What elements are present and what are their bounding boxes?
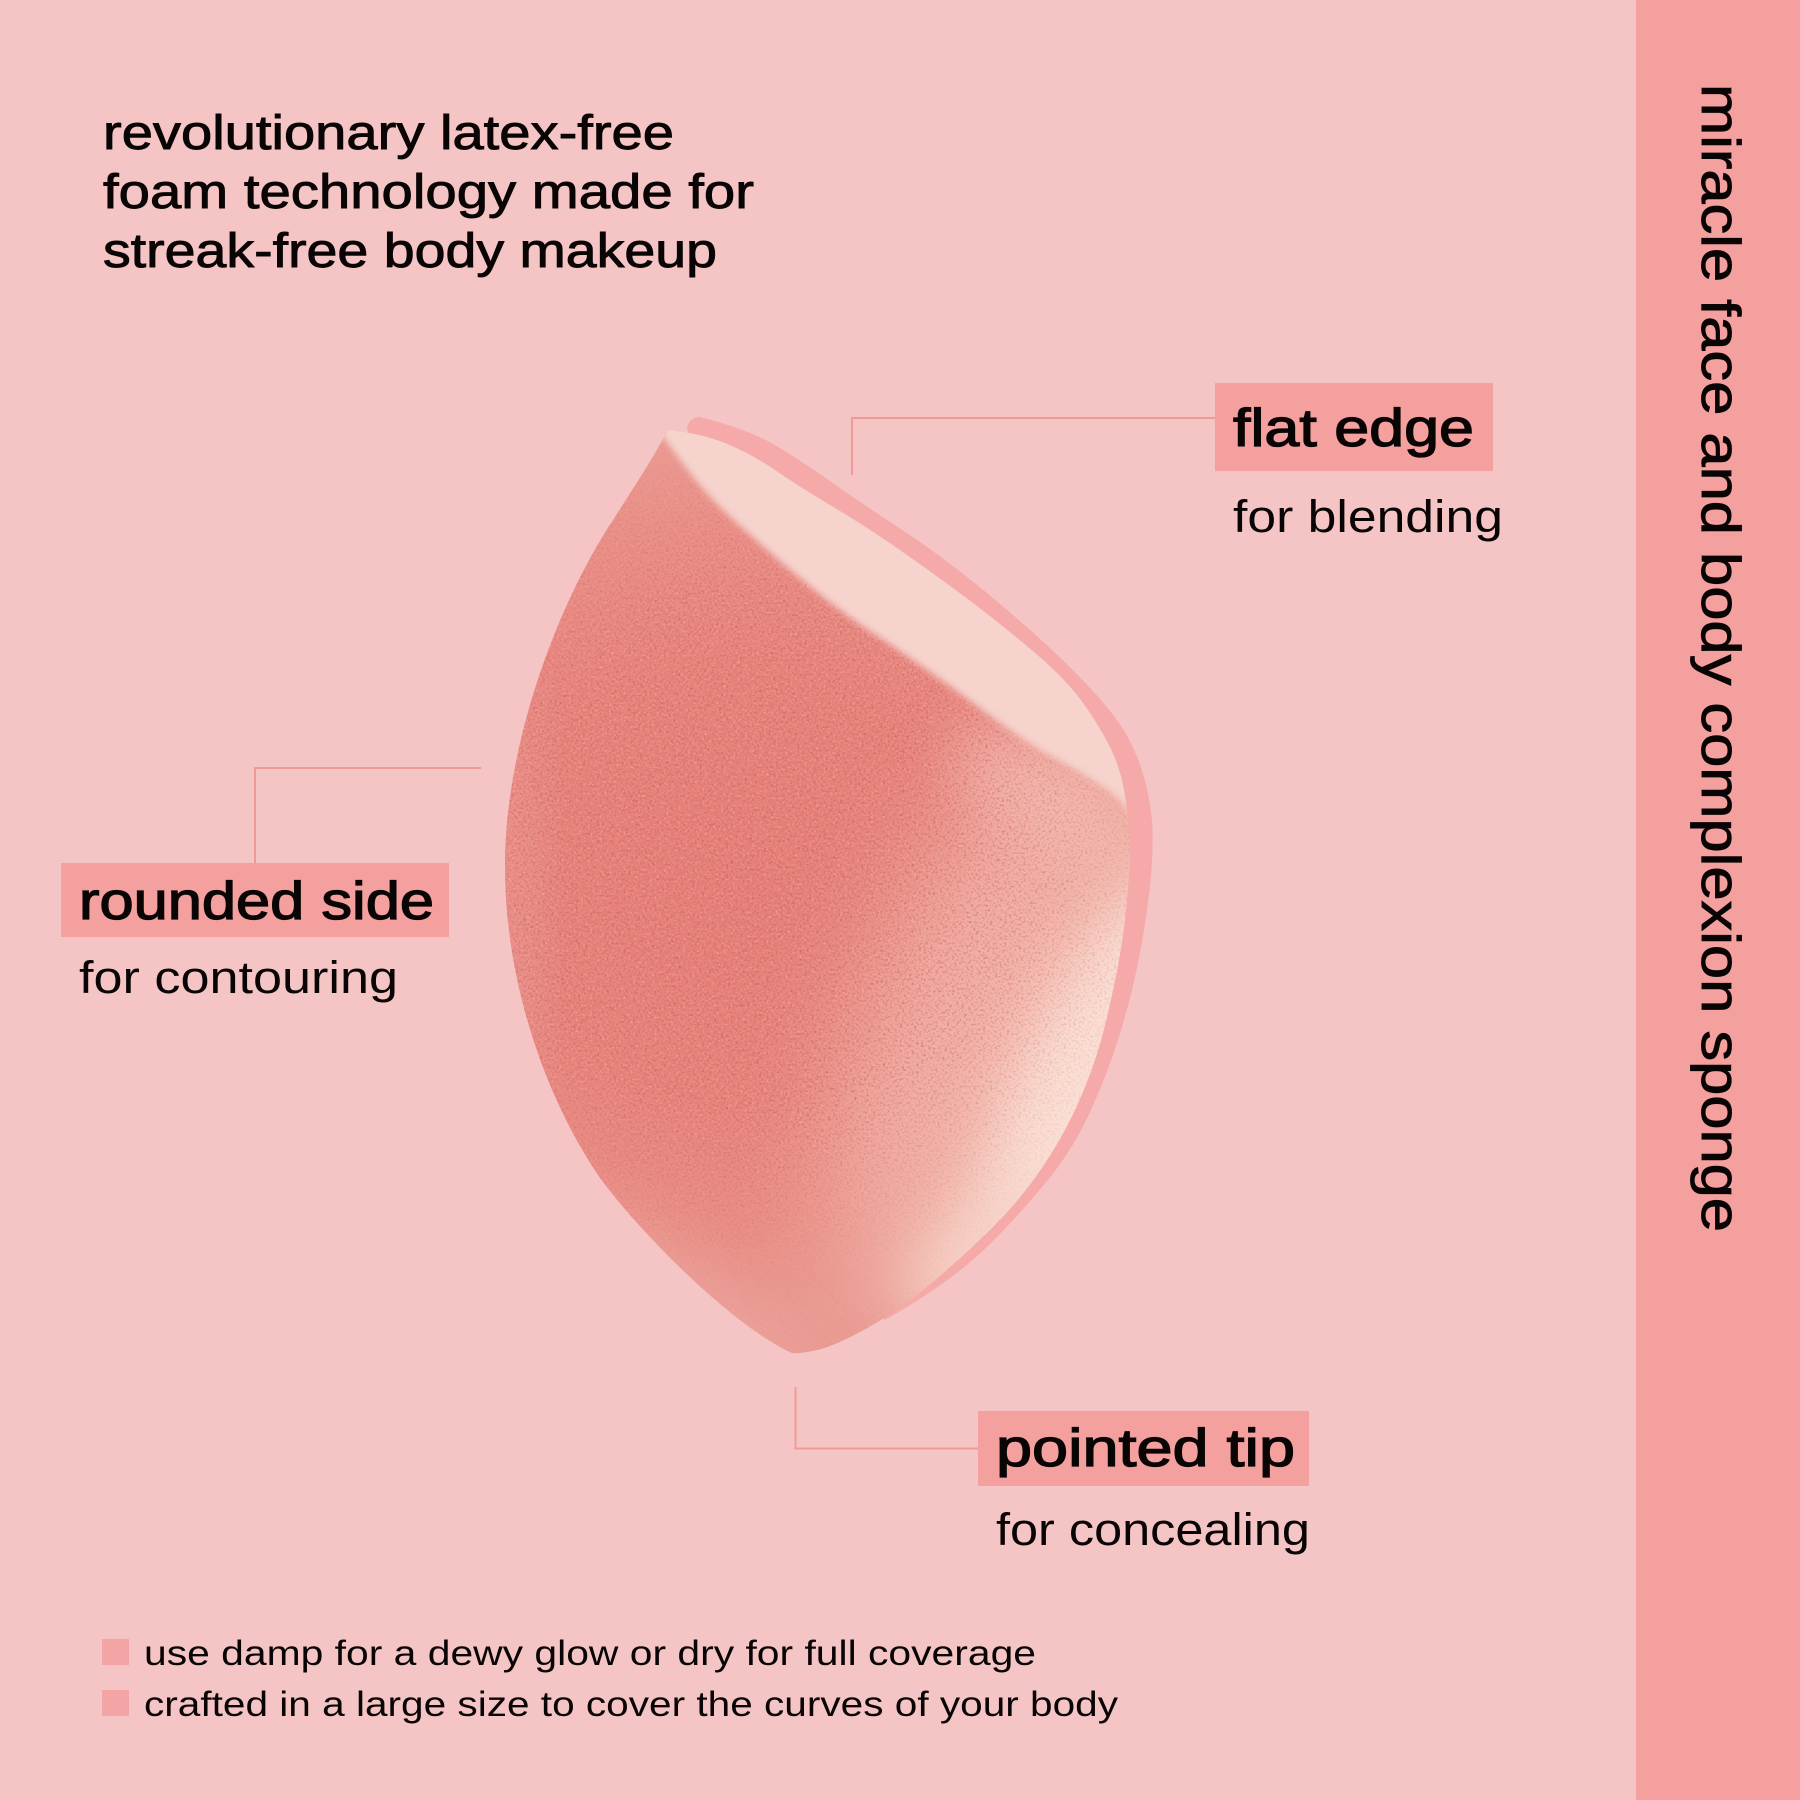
bullet: crafted large: crafted in a large size to cover the curves of your body [144, 1685, 1119, 1724]
vertical title: miracle face and body complexion sponge [1690, 84, 1752, 1232]
headline text block: streak-free body makeup [103, 225, 717, 278]
label highlight [978, 1411, 1309, 1486]
callout: rounded side [61, 768, 481, 1003]
sub text: for concealing [996, 1504, 1310, 1555]
flat face of sponge [662, 430, 1128, 814]
headline text block [103, 107, 754, 278]
label text: flat edge [1233, 399, 1474, 458]
leader line [796, 1387, 978, 1448]
label text: rounded side [79, 872, 434, 931]
sub text: for blending [1233, 491, 1503, 542]
panel: right side bar [1636, 0, 1800, 1800]
callout: pointed tip [796, 1387, 1310, 1555]
bullet list [102, 1634, 1119, 1724]
callout: flat edge [852, 383, 1503, 542]
sub text: for contouring [79, 952, 398, 1003]
label highlight [61, 863, 449, 937]
bullet: use damp: use damp for a dewy glow or dry for full coverage [144, 1634, 1036, 1673]
sponge offset shadow shape [687, 417, 1153, 1320]
sponge illustration [505, 417, 1152, 1354]
leader line [852, 418, 1215, 475]
label text: pointed tip [996, 1419, 1295, 1478]
label highlight [1215, 383, 1493, 471]
leader line [255, 768, 481, 863]
headline text block: foam technology made for [103, 166, 754, 219]
headline text block: revolutionary latex-free [103, 107, 674, 160]
sponge body [505, 430, 1130, 1354]
